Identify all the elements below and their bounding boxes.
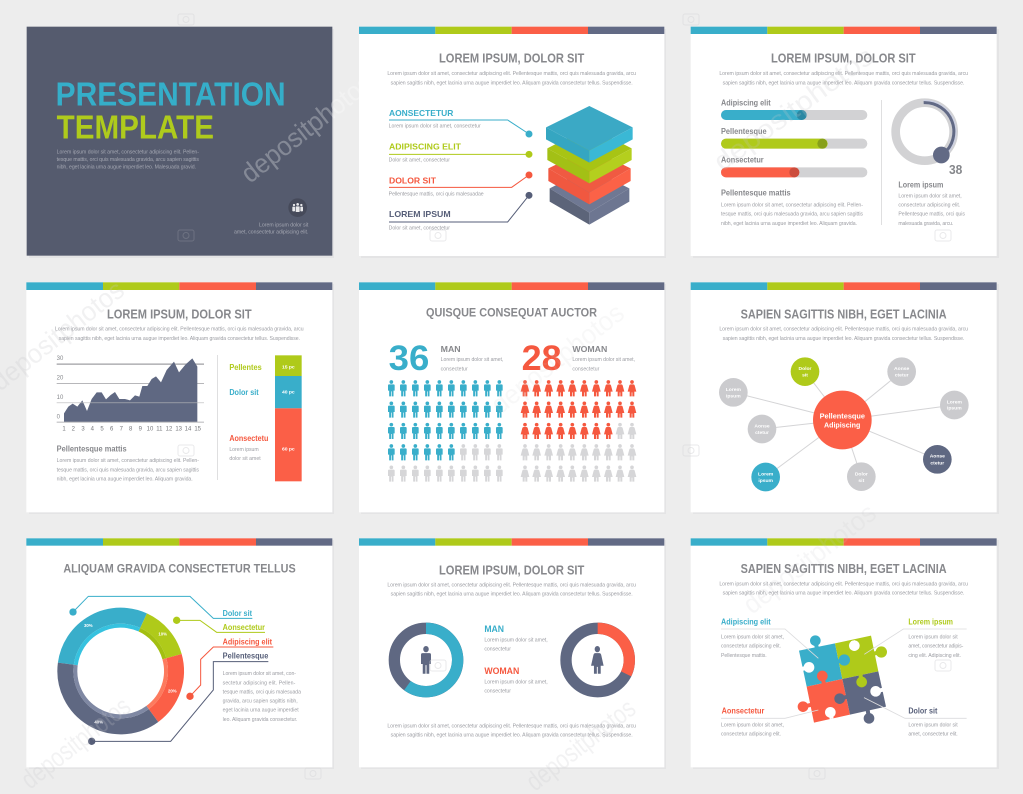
intro text [719, 71, 968, 86]
pictogram: women [521, 380, 636, 482]
slide background [359, 27, 664, 256]
puzzle pieces [798, 635, 887, 724]
progress bar: pellentesque: Pellentesque [721, 127, 767, 136]
intro text: Lorem ipsum dolor sit amet, consectetur adipiscing elit. Pellentesque mattis, orci quis malesuada gravida, arcu [387, 583, 636, 589]
intro text [387, 583, 636, 598]
watermarks: depositphotos [15, 691, 136, 794]
intro text [55, 327, 304, 342]
legend: man: consectetur [484, 647, 511, 653]
watermarks: depositphotos [520, 693, 641, 794]
area chart: 3 [81, 427, 85, 433]
panel: man and woman donuts [359, 538, 664, 767]
text block: pellentesque mattis: Pellentesque mattis [57, 444, 127, 453]
intro text: sapien sagittis nibh, eget lacinia urna augue imperdiet leo. Aliquam gravida consectetur tellus. Suspendisse. [391, 592, 633, 598]
slide background [359, 538, 664, 767]
area chart: 9 [139, 427, 143, 433]
donut: man [394, 628, 458, 692]
stat: woman 28: 28 [522, 339, 562, 378]
node: lorem ipsum blue: Lorem [758, 472, 774, 478]
callout: adipiscing elit: Dolor sit amet, consectetur [389, 158, 450, 164]
cover footer text [234, 223, 309, 235]
heading: SAPIEN SAGITTIS NIBH, EGET LACINIA [741, 306, 947, 321]
heading: LOREM IPSUM, DOLOR SIT [107, 306, 252, 321]
intro text: sapien sagittis nibh, eget lacinia urna augue imperdiet leo. Aliquam gravida consectetur tellus. Suspendisse. [723, 336, 964, 342]
callout: dolor sit: DOLOR SIT [389, 175, 436, 185]
callout: aonsectetur [389, 108, 532, 137]
intro text: Lorem ipsum dolor sit amet, consectetur adipiscing elit. Pellentesque mattis, orci quis malesuada gravida, arcu [55, 327, 304, 333]
node: lorem ipsum grey left: Lorem [726, 387, 742, 393]
legend: man [484, 624, 548, 653]
node: aonsectetur grey top: ctetur [895, 372, 909, 378]
stacked bar: 40 pc [282, 389, 295, 395]
pictogram: men [388, 380, 503, 482]
watermarks: depositphotos [737, 498, 882, 620]
progress bar: pellentesque [721, 127, 867, 149]
area chart: 4 [91, 427, 95, 433]
description text: sectetur adipiscing elit. Pellen- [223, 680, 296, 686]
node: dolor sit green: sit [802, 373, 808, 379]
area chart: 11 [156, 427, 163, 433]
callout: aonsectetur: Lorem ipsum dolor sit amet, [721, 723, 784, 729]
area chart: 0 [57, 414, 61, 420]
area chart [57, 356, 204, 433]
area chart: 7 [120, 427, 124, 433]
text block: pellentesque mattis: nibh, eget lacinia urna augue imperdiet leo. Aliquam gravida. [721, 221, 857, 227]
text block: pellentesque mattis: tesque mattis, orci quis malesuada gravida, arcu sapien sagittis [57, 467, 199, 473]
stat: woman 28: WOMAN [572, 344, 607, 354]
watermarks: depositphotos [485, 298, 630, 420]
leader: dolor sit: Dolor sit [223, 609, 252, 618]
callout: lorem ipsum: Lorem ipsum [908, 617, 953, 626]
watermarks: depositphotos [708, 41, 879, 177]
cover footer text: Lorem ipsum dolor sit [259, 223, 309, 229]
text block: lorem ipsum: Pellentesque mattis, orci quis [898, 212, 965, 218]
progress bar: aonsectetur [721, 156, 867, 177]
node: aonsectetur slate [923, 445, 952, 474]
node: dolor sit grey [847, 462, 876, 491]
heading: QUISQUE CONSEQUAT AUCTOR [426, 305, 597, 319]
callout: aonsectetur [721, 706, 818, 738]
footer text [387, 723, 636, 739]
cover text [57, 149, 199, 171]
panel: people pictograms [359, 282, 664, 512]
callout: adipiscing elit [389, 142, 532, 164]
hub: Pellentesque [820, 411, 865, 420]
legend: woman: consectetur [484, 689, 511, 695]
cover background [27, 27, 332, 256]
legend: woman [484, 666, 548, 695]
area chart: 8 [129, 427, 133, 433]
callout: lorem ipsum: LOREM IPSUM [389, 209, 451, 219]
progress bar: adipiscing elit: Adipiscing elit [721, 98, 771, 107]
callout: lorem ipsum [389, 192, 532, 232]
area chart: 6 [110, 427, 114, 433]
node: aonsectetur grey left: ctetur [755, 430, 769, 436]
colour bar [691, 538, 997, 546]
panel: hub and spoke diagram [691, 282, 997, 512]
stacked bar: 60 pc [282, 446, 295, 452]
callout: lorem ipsum [864, 617, 967, 659]
donut: woman [566, 628, 629, 692]
text block: lorem ipsum: Lorem ipsum [898, 180, 943, 189]
area chart: 5 [100, 427, 104, 433]
text block: pellentesque mattis [721, 189, 863, 227]
intro text [387, 71, 636, 86]
intro text: Lorem ipsum dolor sit amet, consectetur adipiscing elit. Pellentesque mattis, orci quis malesuada gravida, arcu [719, 71, 968, 77]
node: lorem ipsum grey right: Lorem [947, 399, 963, 405]
colour bar [359, 538, 664, 546]
stat: woman 28 [522, 339, 635, 378]
donut chart [65, 616, 177, 726]
panel: cover slide [27, 27, 332, 256]
cover title: TEMPLATE [57, 108, 214, 145]
colour bar [691, 27, 997, 34]
slide background [359, 282, 664, 512]
donut chart: 30% [84, 623, 93, 628]
node: dolor sit green [791, 357, 819, 386]
watermark cameras [178, 14, 951, 779]
callout: dolor sit: Pellentesque mattis, orci quis malesuadae [389, 192, 484, 198]
watermarks: depositphotos [235, 68, 378, 189]
footer text: Lorem ipsum dolor sit amet, consectetur adipiscing elit. Pellentesque mattis, orci quis malesuada gravida, arcu [387, 723, 636, 729]
panel: progress bars and gauge [691, 27, 997, 256]
colour bar [691, 282, 997, 290]
cover title: PRESENTATION [56, 76, 286, 113]
hub: Adipiscing [824, 421, 860, 430]
area chart: 20 [57, 376, 64, 382]
node: lorem ipsum blue: ipsum [758, 478, 774, 484]
node: lorem ipsum grey right [940, 391, 969, 419]
node: dolor sit green: Dolor [798, 366, 812, 372]
text block: pellentesque mattis [57, 444, 199, 482]
leader: pellentesque: Pellentesque [223, 651, 269, 660]
panel: stacked layers [359, 27, 664, 256]
text block: lorem ipsum [898, 180, 965, 227]
intro text: sapien sagittis nibh, eget lacinia urna augue imperdiet leo. Aliquam gravida consectetur tellus. Suspendisse. [391, 80, 633, 86]
colour bar [26, 538, 332, 546]
bar legend: Lorem ipsum [229, 447, 259, 453]
panel: segmented donut [26, 538, 332, 767]
node: dolor sit grey: sit [858, 478, 865, 484]
text block: lorem ipsum: Lorem ipsum dolor sit amet, [898, 193, 962, 199]
slide background [691, 538, 997, 767]
area chart: 1 [62, 427, 66, 433]
leader: dolor sit [69, 596, 252, 618]
text block: pellentesque mattis: Pellentesque mattis [721, 189, 791, 198]
stat: man 36 [389, 339, 503, 378]
callout: lorem ipsum: amet, consectetur adipis- [908, 644, 964, 650]
callout: adipiscing elit: Pellentesque mattis. [721, 653, 767, 659]
leader: pellentesque [88, 651, 269, 745]
text block: pellentesque mattis: Lorem ipsum dolor sit amet, consectetur adipiscing elit. Pellen- [721, 203, 863, 209]
node: lorem ipsum blue [751, 463, 780, 491]
bar legend [229, 363, 268, 462]
callout: adipiscing elit [721, 617, 818, 659]
callout: dolor sit: amet, consectetur elit. [908, 732, 958, 738]
heading: LOREM IPSUM, DOLOR SIT [771, 51, 916, 66]
intro text: sapien sagittis nibh, eget lacinia urna augue imperdiet leo. Aliquam gravida consectetur tellus. Suspendisse. [59, 336, 300, 342]
callout: dolor sit: Dolor sit [908, 706, 938, 715]
callout: adipiscing elit: ADIPISCING ELIT [389, 142, 461, 152]
stat: man 36: Lorem ipsum dolor sit amet, [441, 357, 503, 363]
area chart: 10 [147, 427, 154, 433]
heading: LOREM IPSUM, DOLOR SIT [439, 562, 584, 577]
stat: man 36: consectetur [441, 366, 468, 372]
intro text [719, 327, 968, 342]
colour bar [26, 282, 332, 290]
colour bar [359, 27, 664, 34]
node: lorem ipsum grey left [719, 378, 748, 407]
gauge ring: 38 [949, 163, 962, 177]
stat: woman 28: consectetur [572, 366, 600, 372]
cover footer text: amet, consectetur adipiscing elit. [234, 229, 308, 235]
legend: woman: WOMAN [484, 666, 519, 676]
callout: lorem ipsum: cing elit. Adipiscing elit. [908, 653, 961, 659]
heading: ALIQUAM GRAVIDA CONSECTETUR TELLUS [63, 561, 296, 575]
callout: adipiscing elit: Adipiscing elit [721, 617, 771, 626]
text block: pellentesque mattis: Lorem ipsum dolor sit amet, consectetur adipiscing elit. Pellen- [57, 458, 199, 464]
area chart: 15 [194, 427, 202, 433]
cover text: nibh, eget lacinia urna augue imperdiet leo. Malesuada gravid. [57, 165, 196, 171]
slide background [26, 538, 332, 767]
callout: aonsectetur: AONSECTETUR [389, 108, 453, 118]
legend: man: Lorem ipsum dolor sit amet, [484, 637, 548, 643]
intro text: sapien sagittis nibh, eget lacinia urna augue imperdiet leo. Aliquam gravida consectetur tellus. Suspendisse. [723, 591, 964, 597]
callout: dolor sit: Lorem ipsum dolor sit [908, 723, 958, 729]
stacked bar: 15 pc [282, 365, 295, 371]
area chart: 13 [175, 427, 183, 433]
callout: adipiscing elit: Lorem ipsum dolor sit amet, [721, 635, 784, 641]
node: aonsectetur slate: ctetur [930, 460, 944, 466]
stat: man 36: 36 [389, 339, 429, 378]
callout: adipiscing elit: consectetur adipiscing elit. [721, 644, 781, 650]
callout: dolor sit [864, 698, 967, 738]
hub [813, 391, 872, 449]
slide background [691, 27, 997, 256]
slide background [26, 282, 332, 512]
bar legend: Dolor sit [229, 388, 259, 397]
description text: leo. Aliquam gravida consectetur. [223, 717, 297, 723]
progress bar: adipiscing elit [721, 98, 867, 120]
isometric layer stack [546, 106, 633, 225]
legend: woman: Lorem ipsum dolor sit amet, [484, 679, 548, 685]
intro text [719, 581, 968, 597]
leader: adipiscing elit: Adipiscing elit [223, 637, 272, 646]
legend: man: MAN [484, 624, 504, 634]
node: dolor sit grey: Dolor [855, 471, 868, 477]
leader: aonsectetur [173, 617, 265, 632]
leader: adipiscing elit [186, 637, 273, 700]
callout: aonsectetur: Lorem ipsum dolor sit amet, consectetur [389, 124, 481, 130]
text block: lorem ipsum: consectetur adipiscing elit. [898, 203, 960, 209]
area chart: 2 [72, 427, 76, 433]
callout: aonsectetur: consectetur adipiscing elit. [721, 732, 781, 738]
callout: dolor sit [389, 171, 532, 198]
text block: pellentesque mattis: nibh, eget lacinia urna augue imperdiet leo. Aliquam gravida. [57, 476, 193, 482]
cover text: tesque mattis, orci quis malesuada gravida, arcu sapien sagittis [57, 157, 199, 163]
slide background [691, 282, 997, 512]
panel: puzzle [691, 538, 997, 767]
bar legend: dolor sit amet [229, 456, 261, 462]
stat: man 36: MAN [441, 344, 461, 354]
leader: aonsectetur: Aonsectetur [223, 623, 265, 632]
progress bar: aonsectetur: Aonsectetur [721, 156, 764, 165]
intro text: sapien sagittis nibh, eget lacinia urna augue imperdiet leo. Aliquam gravida consectetur tellus. Suspendisse. [723, 80, 964, 86]
gauge ring [896, 102, 962, 177]
description text: tesque mattis, orci quis malesuada [223, 689, 301, 695]
callout: aonsectetur: Aonsectetur [722, 706, 764, 715]
donut chart: 10% [158, 632, 167, 637]
area chart: 30 [57, 356, 64, 362]
description text: gravida, arcu sapien sagittis nibh, [223, 699, 298, 705]
callout: lorem ipsum: Lorem ipsum dolor sit [908, 635, 958, 641]
node: aonsectetur slate: Aonse [930, 454, 945, 460]
cover text: Lorem ipsum dolor sit amet, consectetur adipiscing elit. Pellen- [57, 149, 199, 155]
node: aonsectetur grey top: Aonse [894, 366, 910, 372]
text block: lorem ipsum: malesuada gravida, arcu. [898, 221, 953, 227]
heading: LOREM IPSUM, DOLOR SIT [439, 51, 584, 66]
description text: Lorem ipsum dolor sit amet, con- [223, 671, 296, 677]
bar legend: Aonsectetu [229, 434, 268, 443]
area chart: 10 [57, 395, 64, 401]
description text: eget lacinia urna augue imperdiet [223, 708, 299, 714]
panel: area chart and stacked bar [26, 282, 332, 512]
intro text: Lorem ipsum dolor sit amet, consectetur adipiscing elit. Pellentesque mattis, orci quis malesuada gravida, arcu [719, 327, 968, 333]
stacked bar [275, 355, 302, 481]
bar legend: Pellentes [229, 363, 262, 372]
donut chart: 40% [94, 719, 103, 724]
text block: pellentesque mattis: tesque mattis, orci quis malesuada gravida, arcu sapien sagittis [721, 212, 863, 218]
stat: woman 28: Lorem ipsum dolor sit amet, [572, 357, 635, 363]
area chart: 14 [185, 427, 192, 433]
node: lorem ipsum grey left: ipsum [726, 393, 741, 399]
node: aonsectetur grey left: Aonse [754, 424, 770, 430]
intro text: Lorem ipsum dolor sit amet, consectetur adipiscing elit. Pellentesque mattis, orci quis malesuada gravida, arcu [719, 581, 968, 587]
spokes [733, 372, 954, 477]
donut chart: 20% [168, 688, 177, 693]
node: aonsectetur grey left [748, 415, 776, 443]
node: aonsectetur grey top [887, 357, 916, 386]
heading: SAPIEN SAGITTIS NIBH, EGET LACINIA [741, 561, 947, 576]
cover title [56, 76, 286, 145]
node: lorem ipsum grey right: ipsum [947, 406, 962, 412]
intro text: Lorem ipsum dolor sit amet, consectetur adipiscing elit. Pellentesque mattis, orci quis malesuada gravida, arcu [387, 71, 636, 77]
icon: people badge [288, 198, 307, 217]
colour bar [359, 282, 664, 290]
callout: lorem ipsum: Dolor sit amet, consectetur [389, 226, 450, 232]
footer text: sapien sagittis nibh, eget lacinia urna augue imperdiet leo. Aliquam gravida consectetur tellus. Suspendisse. [391, 733, 633, 739]
description text [223, 671, 301, 723]
area chart: 12 [166, 427, 173, 433]
